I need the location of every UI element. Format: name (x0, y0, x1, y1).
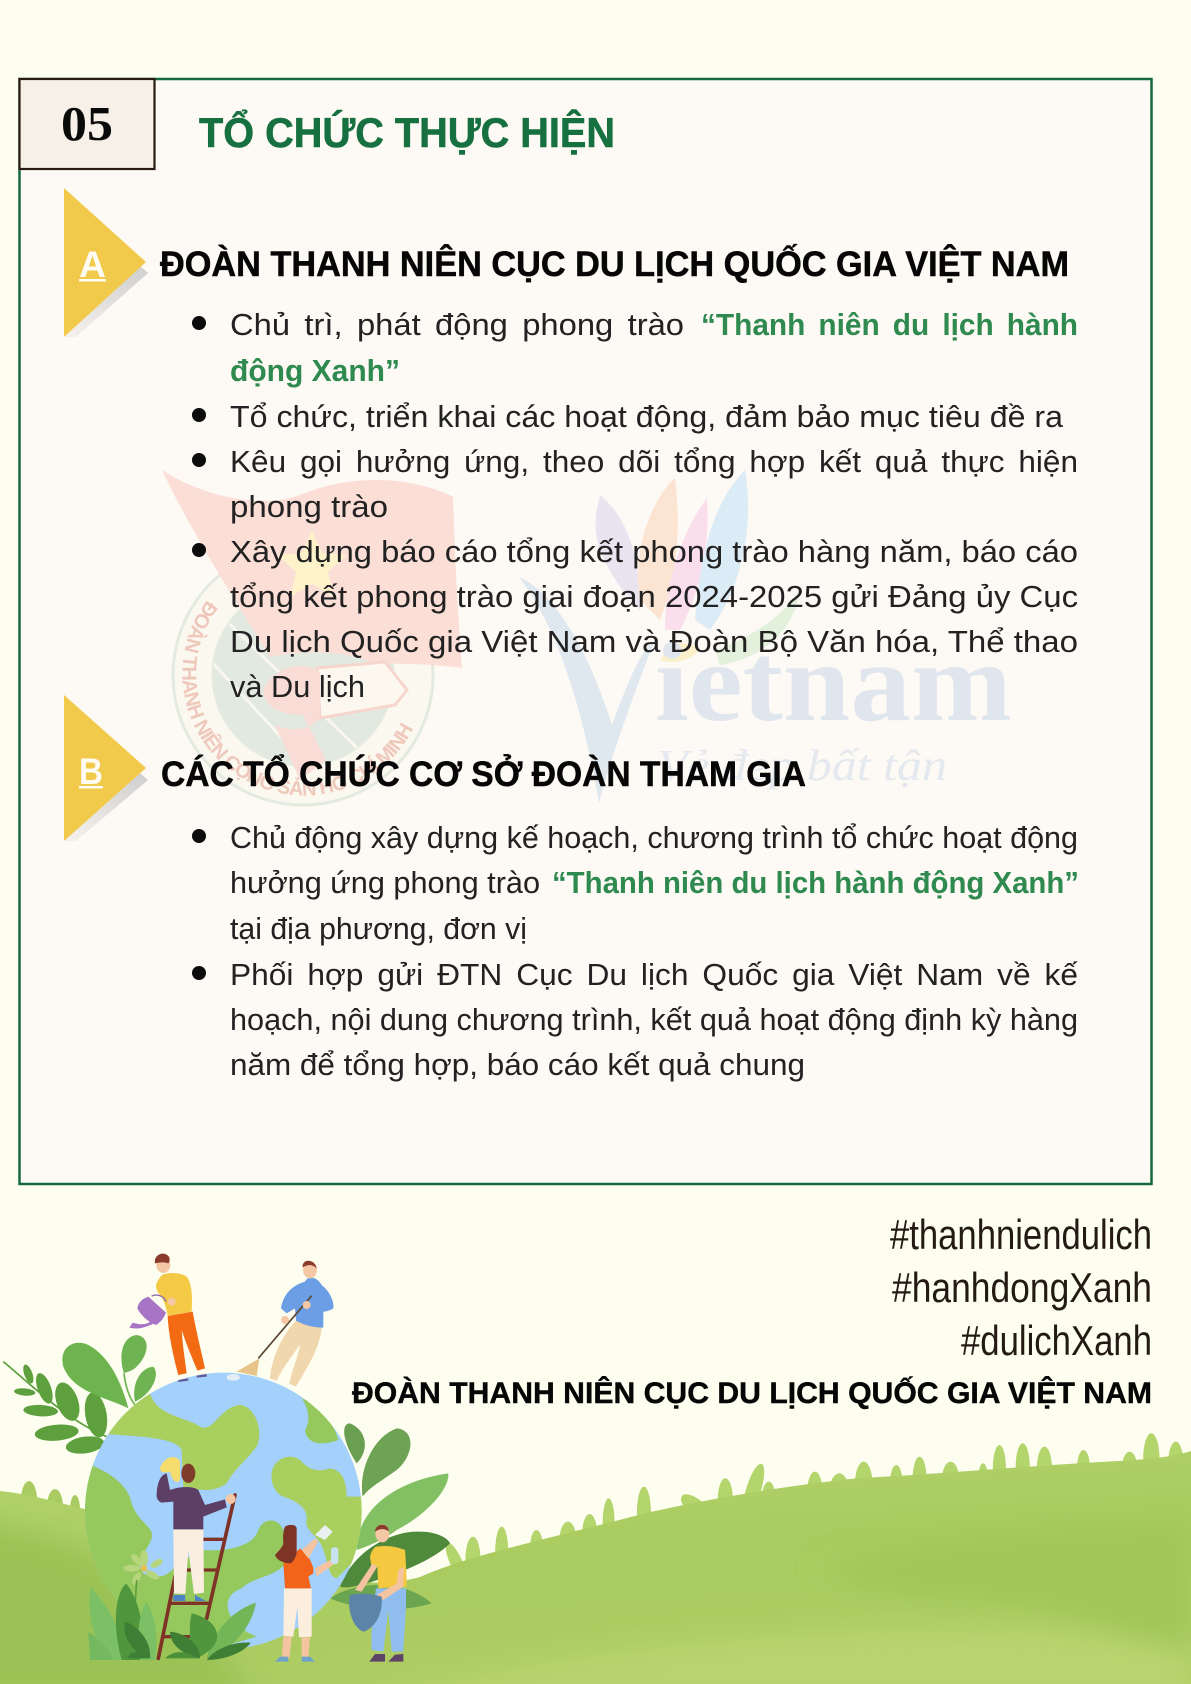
bullet A4: và Du lịch (230, 669, 365, 704)
bullet A2: Tổ chức, triển khai các hoạt động, đảm bảo mục tiêu đề ra (230, 399, 1064, 434)
illustration: earth and volunteers (3, 1254, 450, 1663)
grass tufts left (21, 1481, 80, 1525)
heading B: CÁC TỔ CHỨC CƠ SỞ ĐOÀN THAM GIA (161, 754, 806, 794)
continent right (272, 1457, 365, 1578)
bullet B1: Chủ động xây dựng kế hoạch, chương trình tổ chức hoạt động (230, 820, 1078, 855)
bullet B2: hoạch, nội dung chương trình, kết quả hoạt động định kỳ hàng (230, 1002, 1078, 1037)
marker B: B (79, 751, 103, 792)
flower (123, 1550, 164, 1617)
logo torch (263, 662, 407, 780)
bullet B2: năm để tổng hợp, báo cáo kết quả chung (230, 1047, 805, 1082)
watermark: youth union logo (162, 470, 462, 806)
continent left and bottom (85, 1466, 284, 1644)
man with bag (349, 1524, 407, 1662)
bullet list A (192, 307, 1078, 704)
bullet A1: động Xanh” (230, 353, 400, 388)
bullet A1: “Thanh niên du lịch hành (701, 307, 1078, 342)
grass tufts (441, 1433, 1183, 1585)
logo wordmark: ietnam (655, 621, 1012, 745)
grass lower light band (492, 1634, 1186, 1684)
bullet A4: Xây dựng báo cáo tổng kết phong trào hàng năm, báo cáo (230, 534, 1078, 569)
watermark: Vietnam tourism logo (519, 470, 1012, 803)
bullet A4: tổng kết phong trào giai đoạn 2024-2025 gửi Đảng ủy Cục (230, 579, 1078, 614)
plants behind globe, left (3, 1335, 156, 1456)
logo big V (519, 577, 655, 803)
bullet list B (192, 820, 1079, 1082)
section number box (20, 79, 154, 169)
continent top (100, 1393, 259, 1490)
bullet A4 (192, 534, 1078, 704)
marker B (64, 695, 148, 841)
continent top right (302, 1398, 338, 1443)
marker A (64, 188, 148, 337)
bullet A3: Kêu gọi hưởng ứng, theo dõi tổng hợp kết quả thực hiện (230, 444, 1078, 479)
marker A: A (79, 244, 106, 285)
bullet B1: tại địa phương, đơn vị (230, 911, 527, 946)
section number: 05 (61, 96, 113, 151)
grass left shading (0, 1520, 260, 1684)
logo flag (162, 470, 462, 668)
ladder (158, 1495, 235, 1658)
heading A: ĐOÀN THANH NIÊN CỤC DU LỊCH QUỐC GIA VIỆT NAM (160, 244, 1069, 284)
marker B shadow (64, 773, 148, 841)
bullet A1: Chủ trì, phát động phong trào (230, 307, 684, 342)
bullet A3 (192, 444, 1078, 524)
grass shading patch (896, 1543, 1187, 1648)
bullet B2: Phối hợp gửi ĐTN Cục Du lịch Quốc gia Việt Nam về kế (230, 957, 1078, 992)
logo ring text: ĐOÀN THANH NIÊN CỘNG SẢN HỒ CHÍ MINH (182, 601, 413, 796)
marker A shadow (64, 266, 148, 337)
logo petals (596, 470, 800, 665)
bullet B2 (192, 957, 1078, 1082)
globe (85, 1372, 362, 1648)
bullet B1: “Thanh niên du lịch hành động Xanh” (552, 865, 1079, 900)
section title: TỔ CHỨC THỰC HIỆN (199, 107, 615, 156)
bullet A4: Du lịch Quốc gia Việt Nam và Đoàn Bộ Văn hóa, Thể thao (230, 624, 1078, 659)
bullet A1 (192, 307, 1078, 388)
person watering (129, 1254, 207, 1382)
main panel (20, 79, 1152, 1184)
hashtags (890, 1211, 1152, 1364)
logo star (277, 530, 347, 597)
bullet A3: phong trào (230, 489, 388, 524)
footer organization name: ĐOÀN THANH NIÊN CỤC DU LỊCH QUỐC GIA VIỆT NAM (352, 1376, 1152, 1410)
front plants (88, 1583, 256, 1660)
person on ladder cleaning (157, 1457, 236, 1658)
logo stripes (214, 622, 358, 748)
hashtags: #dulichXanh (961, 1317, 1152, 1364)
logo inner circle (213, 585, 393, 765)
logo outer ring (173, 545, 433, 805)
bullet B1 (192, 820, 1079, 946)
woman cleaning (275, 1525, 338, 1662)
grass hill background (0, 1440, 1191, 1684)
logo tagline: Vẻ đẹp bất tận (657, 741, 947, 790)
person raking (227, 1261, 333, 1387)
bullet B1: hưởng ứng phong trào (230, 865, 540, 900)
plants behind globe, right (330, 1423, 450, 1609)
